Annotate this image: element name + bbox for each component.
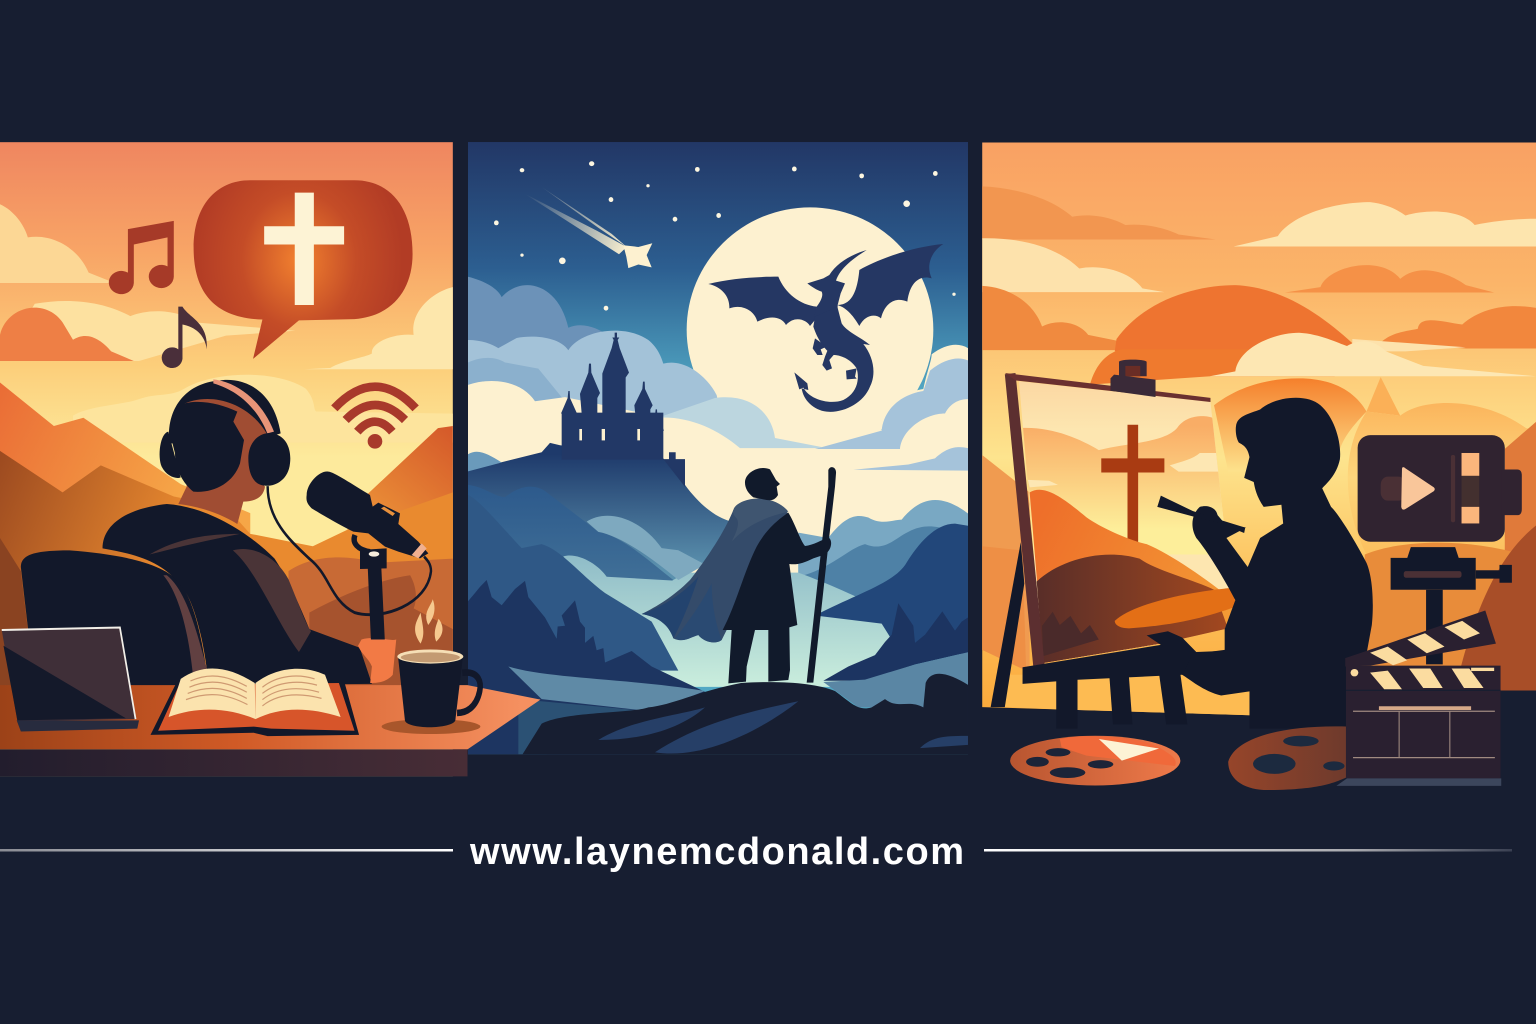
book text lines [186, 676, 322, 706]
panel: christian art and film scene [980, 140, 1536, 790]
sunset sky and hills [982, 142, 1536, 716]
torso [103, 504, 372, 685]
panel: fantasy adventure scene [468, 142, 968, 780]
mid mountains [468, 485, 673, 580]
night sky [468, 142, 968, 780]
easel legs [991, 542, 1024, 707]
camera on tripod [1358, 435, 1522, 664]
ground highlights [598, 701, 968, 754]
paint palette: front [1010, 736, 1180, 785]
right ear cup [248, 433, 290, 486]
easel tray and legs [1023, 631, 1249, 729]
icon: single music note [162, 307, 207, 368]
left ear cup [160, 432, 181, 478]
cloaked traveler with staff [642, 467, 836, 683]
speech bubble with cross [194, 180, 413, 359]
desk [0, 685, 540, 776]
moon [687, 207, 933, 452]
clouds [0, 204, 453, 443]
right tree line [823, 603, 968, 681]
sunset backdrop [0, 142, 453, 776]
staff [807, 467, 836, 683]
open book [151, 668, 359, 736]
head [745, 468, 780, 500]
right clouds [815, 345, 968, 471]
microphone on stand [268, 472, 431, 640]
icon: play triangle [1401, 467, 1435, 510]
hood [732, 498, 788, 542]
mountains [0, 383, 453, 687]
paintbrush [1157, 496, 1245, 533]
tripod [1391, 547, 1476, 590]
footer divider: right [984, 849, 1512, 852]
paint palette: back [1228, 726, 1349, 790]
hair [170, 402, 244, 492]
back clouds [468, 276, 822, 448]
coat and legs [723, 513, 831, 683]
panel: podcast studio scene [0, 142, 540, 776]
painting on canvas [1019, 381, 1235, 663]
left tree line [468, 580, 705, 756]
castle hill [468, 442, 728, 580]
icon: wifi signal [334, 387, 416, 444]
headband stripe [213, 379, 274, 433]
sun glow and hills [982, 349, 1536, 718]
hand [358, 638, 396, 683]
sky clouds [982, 186, 1536, 351]
cream cloud [1210, 333, 1536, 376]
black dome [169, 380, 281, 443]
steam [415, 599, 443, 644]
infographic canvas [0, 142, 1536, 872]
website address: www.laynemcdonald.com [469, 831, 964, 873]
laptop [2, 627, 139, 732]
skin [178, 399, 267, 524]
film clapperboard [1336, 611, 1501, 786]
cape [642, 503, 788, 642]
icon: double music note [109, 221, 174, 294]
dragon silhouette [708, 244, 943, 412]
mist valley [672, 572, 890, 687]
castle silhouette [561, 333, 685, 487]
cream horizon and clouds [468, 381, 968, 573]
castle windows [579, 429, 640, 440]
shooting star [523, 187, 652, 268]
easel frame and clip [1005, 360, 1210, 666]
head and headphones [160, 379, 290, 524]
stars [494, 161, 956, 311]
far mountains right [798, 500, 968, 575]
river bands [508, 667, 705, 711]
podcaster [103, 379, 396, 685]
artist silhouette [1182, 398, 1373, 729]
footer divider: left [0, 849, 453, 852]
coffee mug with steam [382, 599, 480, 734]
hilltop ground [522, 674, 968, 754]
office chair [21, 550, 209, 687]
